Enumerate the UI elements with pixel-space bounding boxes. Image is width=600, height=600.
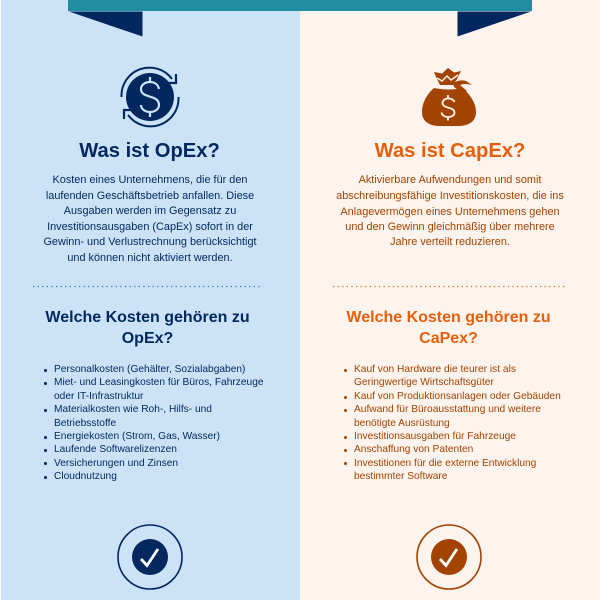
heading: OpEx costs	[45, 309, 250, 347]
heading: OpEx costs: Welche Kosten gehören zu	[45, 309, 250, 326]
list: CapEx costs: Investitionen für die externe Entwicklung	[354, 458, 536, 469]
text block: CapEx definition: und den Gewinn gleichmäßig über mehrere	[345, 221, 555, 233]
list: OpEx costs: Materialkosten wie Roh-, Hilfs- und	[54, 404, 212, 415]
list: CapEx costs: Kauf von Produktionsanlagen oder Gebäuden	[354, 391, 561, 402]
heading: CapEx costs	[346, 309, 551, 347]
panel: OpEx background	[1, 0, 300, 600]
text block: OpEx definition: und können nicht aktiviert werden.	[67, 252, 233, 264]
list: CapEx costs: bestimmter Software	[354, 471, 447, 482]
list: CapEx costs: Geringwertige Wirtschaftsgüter	[354, 377, 494, 388]
list: CapEx costs: Aufwand für Büroausstattung und weitere	[354, 404, 541, 415]
text block: OpEx definition: laufenden Geschäftsbetrieb anfallen. Diese	[46, 190, 254, 202]
icon: OpEx check	[117, 524, 183, 590]
list: OpEx costs: Betriebsstoffe	[54, 418, 116, 429]
list: OpEx costs: Cloudnutzung	[54, 471, 117, 482]
heading: CapEx costs: Welche Kosten gehören zu	[346, 309, 551, 326]
list: CapEx costs: Kauf von Hardware die teurer ist als	[354, 364, 516, 375]
list: OpEx costs: Laufende Softwarelizenzen	[54, 444, 177, 455]
text block: OpEx definition: Investitionsausgaben (CapEx) sofort in der	[47, 221, 253, 233]
list: OpEx costs: Personalkosten (Gehälter, Sozialabgaben)	[54, 364, 245, 375]
icon: dollar cycle	[120, 66, 180, 128]
heading: CapEx costs: CaPex?	[419, 330, 478, 347]
text block: OpEx definition	[43, 174, 257, 264]
text block: OpEx definition: Kosten eines Unternehmens, die für den	[53, 174, 247, 186]
icon: money bag	[422, 68, 476, 126]
text block: CapEx definition: Jahre verteilt reduzieren.	[390, 236, 510, 248]
title: Was ist CapEx: Was ist CapEx?	[375, 140, 525, 162]
panel: CapEx background	[300, 0, 600, 600]
list: OpEx costs: oder IT-Infrastruktur	[54, 391, 143, 402]
text block: CapEx definition: abschreibungsfähige Investitionskosten, die ins	[336, 190, 564, 202]
list: CapEx costs	[344, 364, 561, 482]
text block: CapEx definition	[336, 174, 564, 248]
text block: OpEx definition: Ausgaben werden im Gegensatz zu	[64, 205, 236, 217]
text block: CapEx definition: Aktivierbare Aufwendungen und somit	[359, 174, 541, 186]
icon: CapEx check	[416, 524, 482, 590]
list: OpEx costs: Miet- und Leasingkosten für Büros, Fahrzeuge	[54, 377, 264, 388]
text block: OpEx definition: Gewinn- und Verlustrechnung berücksichtigt	[43, 236, 257, 248]
list: OpEx costs	[44, 364, 264, 482]
banner ribbon	[68, 0, 532, 36]
title: Was ist OpEx: Was ist OpEx?	[79, 140, 220, 162]
list: OpEx costs: Energiekosten (Strom, Gas, Wasser)	[54, 431, 220, 442]
list: CapEx costs: benötigte Ausrüstung	[354, 418, 450, 429]
text block: CapEx definition: Anlagevermögen eines Unternehmens gehen	[340, 206, 560, 218]
list: OpEx costs: Versicherungen und Zinsen	[54, 458, 178, 469]
list: CapEx costs: Investitionsausgaben für Fahrzeuge	[354, 431, 516, 442]
list: CapEx costs: Anschaffung von Patenten	[354, 444, 473, 455]
heading: OpEx costs: OpEx?	[122, 330, 173, 347]
